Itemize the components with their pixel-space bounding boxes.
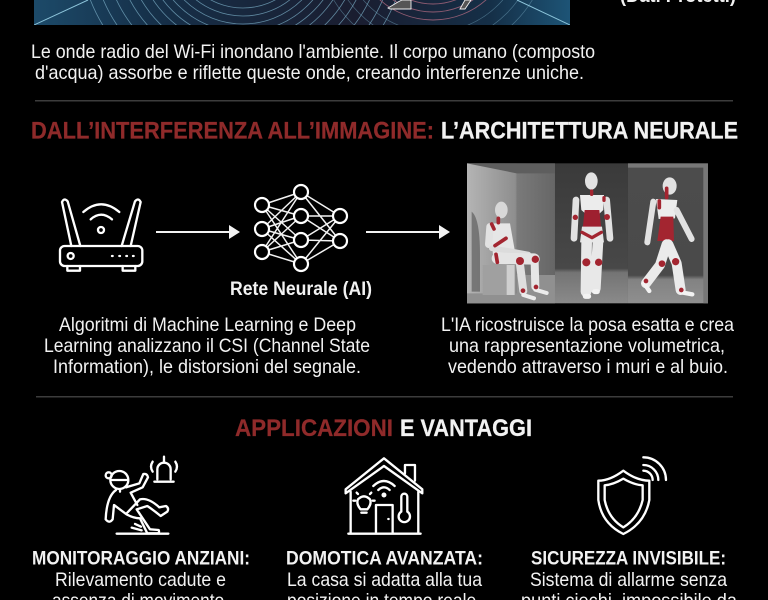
heading: applications bbox=[235, 415, 532, 442]
application: invisible security bbox=[521, 548, 737, 600]
intro text: d'acqua) assorbe e riflette queste onde, creando interferenze uniche. bbox=[35, 62, 584, 84]
application: home automation: La casa si adatta alla tua bbox=[287, 569, 482, 591]
text: machine learning: Algoritmi di Machine Learning e Deep bbox=[59, 314, 356, 336]
application: elderly monitoring bbox=[32, 548, 250, 600]
application: elderly monitoring: MONITORAGGIO ANZIANI: bbox=[32, 548, 250, 570]
intro text: Le onde radio del Wi-Fi inondano l'ambiente. Il corpo umano (composto bbox=[31, 41, 595, 63]
heading: architecture: DALL’INTERFERENZA ALL’IMMAGINE: bbox=[31, 118, 434, 144]
icon: smart home bbox=[346, 458, 422, 534]
label: neural network: Rete Neurale (AI) bbox=[230, 279, 372, 300]
hero illustration: Wi-Fi waves bbox=[34, 0, 570, 25]
heading: architecture bbox=[31, 118, 738, 144]
mannequin: walking bbox=[644, 177, 692, 294]
heading: applications: APPLICAZIONI bbox=[235, 415, 393, 442]
application: invisible security: Sistema di allarme senza bbox=[530, 569, 727, 591]
text: machine learning bbox=[44, 314, 370, 378]
application: home automation: DOMOTICA AVANZATA: bbox=[286, 548, 483, 570]
icon: elderly fall with alarm bbox=[106, 457, 177, 534]
text: pose reconstruction: L'IA ricostruisce la posa esatta e crea bbox=[441, 314, 734, 336]
text: pose reconstruction: una rappresentazione volumetrica, bbox=[449, 335, 725, 357]
application: elderly monitoring: Rilevamento cadute e bbox=[55, 569, 226, 591]
icon: security shield with signal bbox=[598, 457, 666, 534]
application: invisible security: SICUREZZA INVISIBILE: bbox=[531, 548, 726, 570]
image: 3D pose reconstruction bbox=[467, 163, 708, 303]
intro text bbox=[31, 41, 595, 84]
icon: Wi-Fi router bbox=[60, 199, 142, 271]
mannequin: standing bbox=[573, 172, 610, 296]
text: pose reconstruction bbox=[441, 314, 734, 378]
arrow: router to network bbox=[156, 225, 240, 239]
heading: applications: E VANTAGGI bbox=[400, 415, 532, 442]
text: machine learning: Information), le distorsioni del segnale. bbox=[53, 356, 361, 378]
mannequin: seated bbox=[489, 202, 547, 298]
heading: architecture: L’ARCHITETTURA NEURALE bbox=[441, 118, 738, 144]
arrow: network to reconstruction bbox=[366, 225, 450, 239]
icon: neural network bbox=[255, 185, 347, 271]
text: machine learning: Learning analizzano il CSI (Channel State bbox=[44, 335, 370, 357]
application: home automation bbox=[286, 548, 483, 600]
text: pose reconstruction: vedendo attraverso i muri e al buio. bbox=[448, 356, 728, 378]
